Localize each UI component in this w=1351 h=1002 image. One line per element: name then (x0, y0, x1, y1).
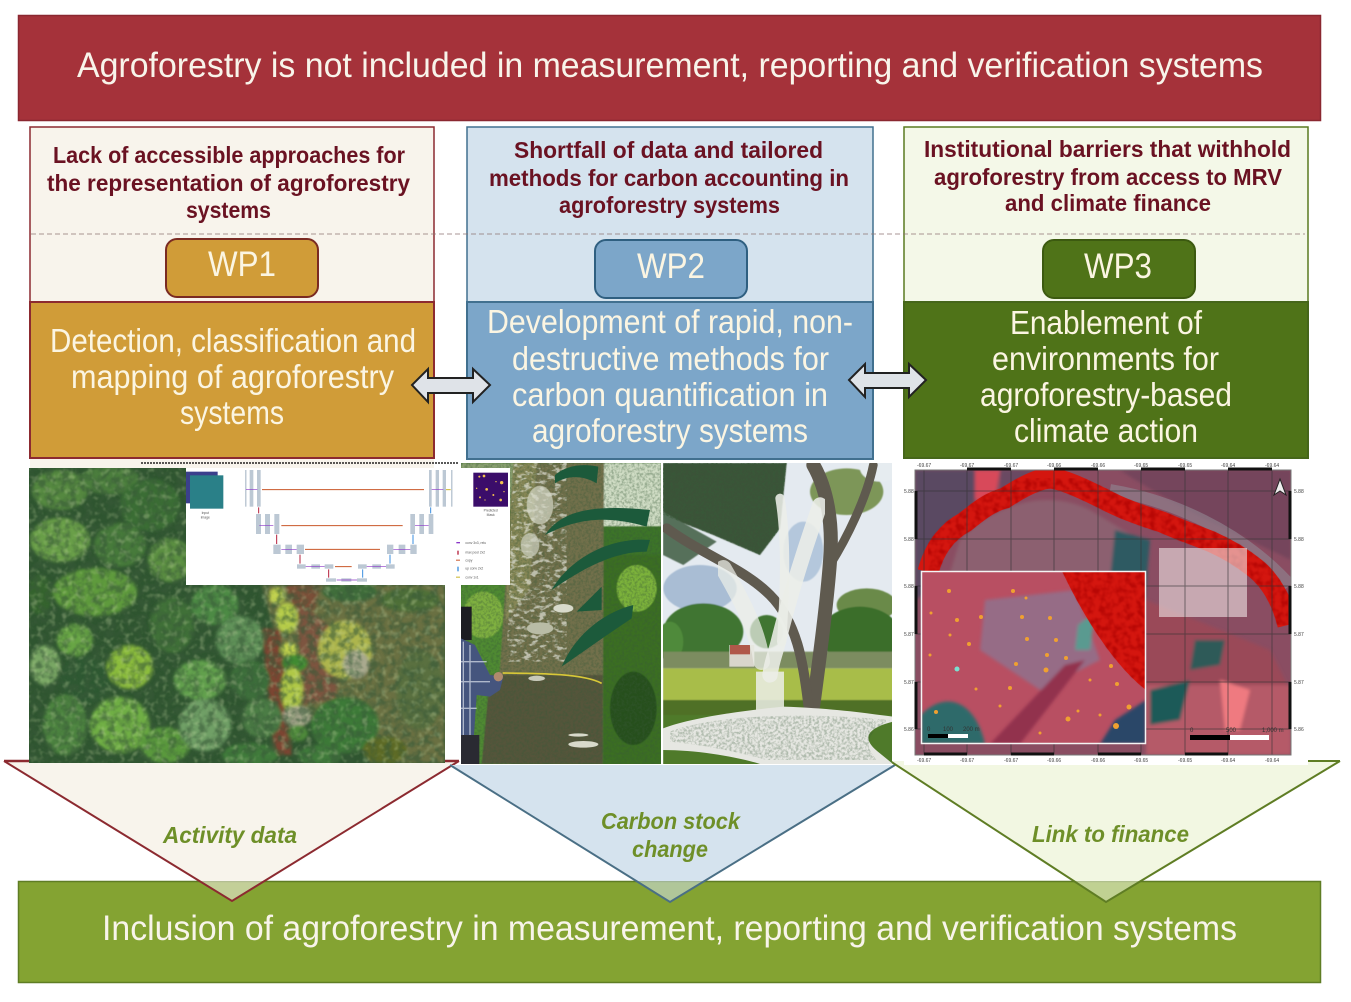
panel WP1 barrier text: systems (186, 197, 271, 223)
panel: WP1 (30, 127, 434, 458)
cabin (729, 645, 754, 667)
panel WP2 barrier text (489, 137, 849, 218)
panel WP3 objective text: agroforestry-based (980, 376, 1232, 413)
arrow: WP1 to WP2 (412, 369, 490, 402)
map coordinate labels: 5.87 (1294, 632, 1304, 638)
panel WP2 barrier text: methods for carbon accounting in (489, 165, 849, 191)
map coordinate labels: -69.64 (1221, 758, 1235, 764)
inset scale bar (927, 727, 980, 738)
top banner: problem statement (18, 16, 1320, 120)
top banner: problem statement: Agroforestry is not included in measurement, reporting and verification systems (77, 46, 1263, 85)
photo: measuring tree trunk with tape (461, 463, 661, 765)
bottom banner: outcome: Inclusion of agroforestry in measurement, reporting and verification systems (102, 909, 1237, 948)
leaves (545, 465, 650, 667)
U-Net legend: up conv 2x2 (465, 567, 483, 571)
map coordinate labels: 5.86 (904, 727, 914, 733)
map black frame ticks (916, 469, 1290, 754)
U-Net legend: conv 1x1 (465, 575, 479, 579)
panel WP2 objective text: agroforestry systems (532, 412, 808, 449)
map inset (921, 571, 1146, 744)
panel WP2 objective text: destructive methods for (512, 340, 829, 377)
map grid (915, 470, 1291, 755)
map coordinate labels: 5.88 (1294, 537, 1304, 543)
WP1 badge: WP1 (208, 245, 276, 284)
map coordinate labels: 5.88 (1294, 489, 1304, 495)
WP2 badge: WP2 (637, 247, 705, 286)
map coordinate labels: -69.66 (1091, 463, 1105, 469)
panel WP1 objective text: mapping of agroforestry (71, 358, 394, 395)
map coordinate labels: -69.64 (1221, 463, 1235, 469)
arrow triangle: activity data (4, 761, 459, 901)
label: activity data: Activity data (162, 822, 297, 848)
map coordinate labels: -69.66 (1047, 463, 1061, 469)
person with checked shirt (461, 607, 503, 765)
label: carbon stock change: change (632, 836, 708, 862)
map coordinate labels: -69.64 (1265, 463, 1279, 469)
panel WP1 barrier text: the representation of agroforestry (47, 170, 410, 196)
panel WP3 lower: objective (904, 302, 1308, 458)
panel WP3 objective text (980, 304, 1232, 449)
map coordinate labels: -69.65 (1178, 463, 1192, 469)
panel WP1 barrier text: Lack of accessible approaches for (53, 142, 405, 168)
panel WP3 barrier text: agroforestry from access to MRV (934, 164, 1283, 190)
map coordinate labels: -69.66 (1091, 758, 1105, 764)
cabin roof (730, 645, 750, 654)
panel WP1 lower: objective (30, 302, 434, 458)
canopy texture (663, 463, 787, 555)
WP1 badge (166, 239, 318, 297)
WP3 badge: WP3 (1084, 247, 1152, 286)
north arrow (1274, 479, 1286, 495)
panel WP2 barrier text: Shortfall of data and tailored (514, 137, 823, 163)
map coordinate labels: -69.64 (1265, 758, 1279, 764)
map coordinate labels: 5.87 (904, 680, 914, 686)
map coordinate labels: 5.88 (904, 537, 914, 543)
map coordinate labels: 5.87 (1294, 680, 1304, 686)
map coordinate labels: 5.86 (1294, 727, 1304, 733)
arrow triangle: link to finance (890, 761, 1340, 902)
photo: aerial view of agroforestry canopy (28, 466, 445, 767)
label: carbon stock change: Carbon stock (601, 808, 741, 834)
U-Net legend: conv 3x3, relu (465, 541, 486, 545)
panel WP1 objective text: systems (180, 394, 284, 431)
U-Net feature blocks (245, 470, 452, 582)
panel WP3 barrier text: and climate finance (1005, 190, 1211, 216)
WP3 badge (1043, 240, 1195, 298)
U-Net input image: Input (202, 511, 209, 515)
arrow triangle: carbon stock change (450, 765, 895, 902)
map coordinate labels: -69.67 (917, 758, 931, 764)
panel: WP3 (904, 127, 1308, 458)
inset scale bar: 200 m (963, 727, 980, 733)
map coordinate labels: -69.67 (917, 463, 931, 469)
U-Net legend: copy (465, 558, 473, 562)
point cloud ground (663, 707, 893, 764)
translucent zoom extent (1159, 548, 1247, 617)
inset scale bar: 100 (943, 727, 954, 733)
panel WP3 barrier text: Institutional barriers that withhold (924, 136, 1291, 162)
U-Net predicted mask (473, 473, 508, 517)
U-Net copy arrows (262, 490, 424, 567)
map coordinate labels: -69.66 (1047, 758, 1061, 764)
U-Net predicted mask: Predicted (484, 509, 498, 513)
inset scale bar: 0 (927, 727, 931, 733)
red riparian forest arc (928, 478, 1288, 625)
panel WP3 barrier text (924, 136, 1291, 216)
U-Net legend (456, 541, 486, 579)
map coordinate labels: 5.88 (904, 489, 914, 495)
map coordinate labels: -69.67 (1004, 463, 1018, 469)
panel WP3 objective text: environments for (992, 340, 1219, 377)
tree trunk and branches (667, 465, 873, 705)
panel WP3 objective text: climate action (1014, 412, 1198, 449)
U-Net down and up arrows (246, 490, 451, 580)
measuring tape (503, 673, 602, 683)
diagram: U-Net architecture (186, 468, 510, 585)
label: carbon stock change (601, 808, 741, 862)
strip below WP1 (30, 459, 434, 469)
panel WP1 objective text: Detection, classification and (50, 322, 416, 359)
map inset border (922, 572, 1146, 744)
bottom banner: outcome (18, 882, 1320, 982)
WP2 badge (595, 240, 747, 298)
panel WP2 lower: objective (467, 302, 873, 459)
panel: WP2 (467, 127, 873, 459)
U-Net input image (186, 472, 223, 519)
map coordinate labels: -69.65 (1134, 463, 1148, 469)
panel WP2 barrier text: agroforestry systems (559, 192, 780, 218)
scale bar (1190, 728, 1284, 740)
map coordinate labels: 5.88 (904, 584, 914, 590)
map coordinate labels: -69.65 (1178, 758, 1192, 764)
scale bar: 1,000 m (1262, 728, 1284, 734)
point cloud Y shape (723, 498, 820, 712)
map coordinate labels: 5.88 (1294, 584, 1304, 590)
U-Net input image: image (201, 515, 210, 519)
panel WP1 barrier text (47, 142, 410, 223)
map coordinate labels: -69.65 (1134, 758, 1148, 764)
panel WP2 objective text (487, 303, 853, 449)
panel WP2 upper: barrier (467, 127, 873, 302)
map coordinate labels: -69.67 (960, 758, 974, 764)
map coordinate labels: 5.87 (904, 632, 914, 638)
map: false colour satellite image (904, 459, 1308, 765)
scale bar: 500 (1226, 728, 1237, 734)
grey band outside arc (1110, 490, 1290, 585)
arrow: WP2 to WP3 (849, 364, 926, 397)
U-Net legend: max pool 2x2 (465, 551, 485, 555)
panel WP1 objective text (50, 322, 416, 431)
panel WP1 upper: barrier (30, 127, 434, 302)
label: link to finance: Link to finance (1032, 821, 1189, 847)
photo: point cloud over tree (657, 455, 900, 765)
panel WP3 objective text: Enablement of (1010, 304, 1203, 341)
U-Net predicted mask: Mask (487, 513, 495, 517)
ground texture (670, 716, 890, 760)
panel WP3 upper: barrier (904, 127, 1308, 302)
map coordinate labels (904, 463, 1304, 764)
scale bar: 0 (1190, 728, 1194, 734)
panel WP2 objective text: carbon quantification in (512, 376, 828, 413)
map coordinate labels: -69.67 (1004, 758, 1018, 764)
panel WP2 objective text: Development of rapid, non- (487, 303, 853, 340)
map frame ticks (915, 470, 1291, 755)
map coordinate labels: -69.67 (960, 463, 974, 469)
bark lichen patches (507, 463, 567, 662)
